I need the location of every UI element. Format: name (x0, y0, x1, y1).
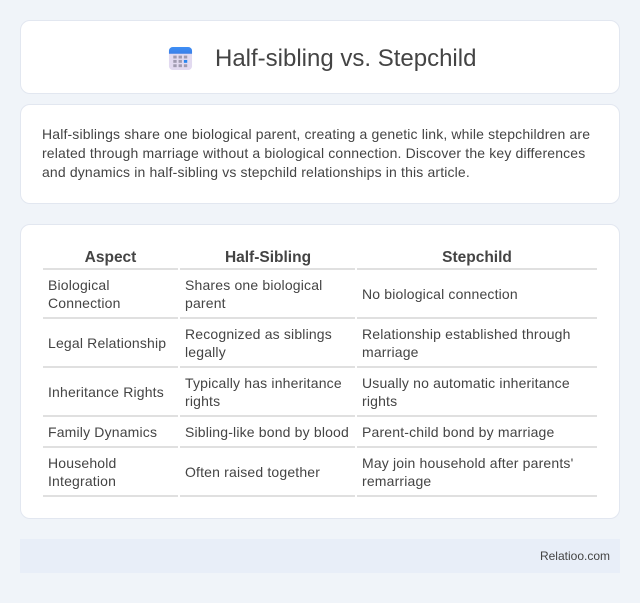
cell: half-sibling household: Often raised together (185, 464, 320, 480)
cell: stepchild inheritance (362, 375, 570, 409)
title: Half-sibling vs. Stepchild (215, 45, 476, 72)
footer bar (20, 539, 620, 573)
row: Household Integration: Household (48, 455, 116, 471)
column heading: Half-Sibling: Half-Sibling (225, 249, 311, 266)
row: Family Dynamics: Family Dynamics (48, 424, 157, 440)
panel: comparison table (20, 224, 620, 519)
cell: half-sibling biological (185, 277, 322, 311)
cell: stepchild legal: Relationship established through (362, 326, 571, 342)
intro text: Half-siblings share one biological parent, creating a genetic link, while stepchildren are (42, 126, 590, 142)
row: Legal Relationship: Legal Relationship (48, 335, 166, 351)
cell: stepchild inheritance: rights (362, 393, 397, 409)
cell: stepchild legal (362, 326, 571, 360)
row: Inheritance Rights: Inheritance Rights (48, 384, 164, 400)
cell: stepchild household (362, 455, 573, 489)
cell: half-sibling legal: legally (185, 344, 226, 360)
cell: half-sibling biological: parent (185, 295, 226, 311)
cell: stepchild legal: marriage (362, 344, 419, 360)
row: Biological Connection (48, 277, 121, 311)
cell: stepchild household: May join household after parents' (362, 455, 573, 471)
column heading: Aspect: Aspect (85, 249, 136, 266)
cell: half-sibling inheritance: rights (185, 393, 220, 409)
intro text: related through marriage without a biological connection. Discover the key differences (42, 145, 585, 161)
cell: stepchild biological: No biological connection (362, 286, 518, 302)
cell: half-sibling legal: Recognized as siblings (185, 326, 332, 342)
row: Biological Connection: Biological (48, 277, 110, 293)
intro text: and dynamics in half-sibling vs stepchild relationships in this article. (42, 164, 470, 180)
row: Household Integration: Integration (48, 473, 116, 489)
cell: half-sibling dynamics: Sibling-like bond by blood (185, 424, 349, 440)
footer text: Relatioo.com (540, 549, 610, 563)
icon: calendar (168, 47, 192, 70)
cell: stepchild dynamics: Parent-child bond by marriage (362, 424, 554, 440)
panel: title card (20, 20, 620, 94)
cell: stepchild household: remarriage (362, 473, 431, 489)
cell: half-sibling legal (185, 326, 332, 360)
cell: half-sibling biological: Shares one biological (185, 277, 322, 293)
intro text (42, 126, 590, 180)
row: Biological Connection: Connection (48, 295, 121, 311)
panel: introduction (20, 104, 620, 204)
cell: half-sibling inheritance: Typically has inheritance (185, 375, 342, 391)
column heading: Stepchild: Stepchild (442, 249, 512, 266)
cell: stepchild inheritance: Usually no automatic inheritance (362, 375, 570, 391)
row: Household Integration (48, 455, 116, 489)
cell: half-sibling inheritance (185, 375, 342, 409)
